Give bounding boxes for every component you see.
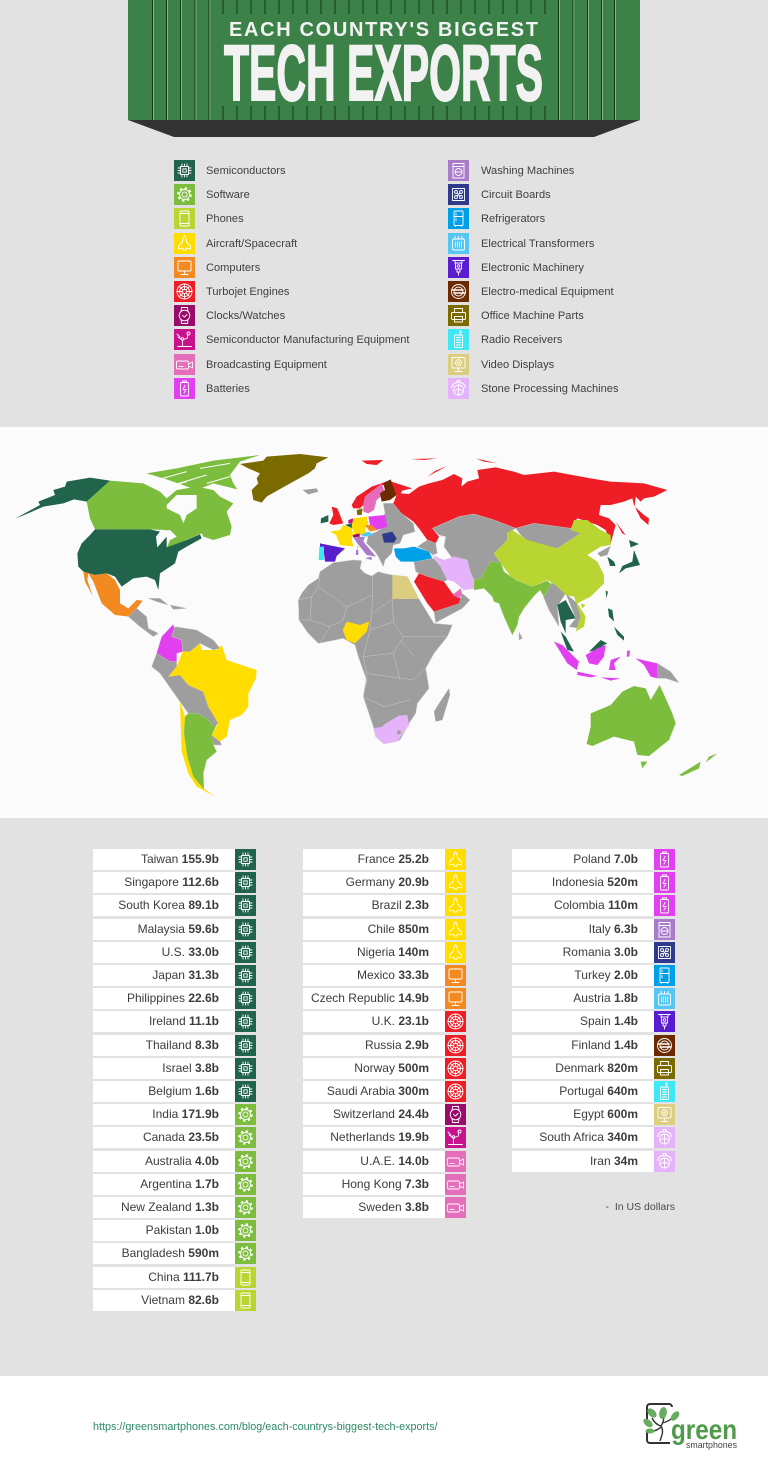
row: Egypt: Egypt 600m [573, 1107, 638, 1121]
legend item: Video Displays: Video Displays [481, 359, 554, 371]
row: Ireland: Ireland 11.1b [149, 1014, 219, 1028]
row: Australia [93, 1151, 256, 1172]
row: Argentina: Argentina 1.7b [140, 1177, 219, 1191]
row: Chile [303, 919, 466, 940]
row: Nigeria: Nigeria 140m [357, 945, 429, 959]
row: Austria: Austria 1.8b [573, 991, 638, 1005]
legend item: Electrical Transformers [448, 233, 594, 254]
row: U.A.E.: U.A.E. 14.0b [360, 1154, 429, 1168]
legend item: Video Displays [448, 354, 554, 375]
row: Thailand: Thailand 8.3b [146, 1038, 219, 1052]
map: Chile [180, 702, 215, 797]
legend item: Phones: Phones [206, 213, 244, 225]
row: Philippines: Philippines 22.6b [127, 991, 219, 1005]
row: Switzerland [303, 1104, 466, 1125]
row: South Korea: South Korea 89.1b [118, 898, 219, 912]
map: Egypt [392, 575, 419, 599]
legend item: Stone Processing Machines: Stone Processing Machines [481, 383, 619, 395]
row: Brazil: Brazil 2.3b [372, 898, 429, 912]
map: Britain and Ireland [321, 507, 343, 525]
table column 3 [512, 849, 675, 1172]
map: Mexico [83, 572, 143, 617]
row: India [93, 1104, 256, 1125]
row: Argentina [93, 1174, 256, 1195]
row: Vietnam: Vietnam 82.6b [141, 1293, 219, 1307]
legend item: Office Machine Parts: Office Machine Parts [481, 310, 584, 322]
map: Turkey [394, 547, 432, 562]
map: Eastern Europe grey [367, 503, 415, 567]
row: Turkey: Turkey 2.0b [574, 968, 638, 982]
legend item: Electronic Machinery: Electronic Machinery [481, 262, 584, 274]
row: Russia [303, 1035, 466, 1056]
row: Finland: Finland 1.4b [571, 1038, 638, 1052]
row: Germany: Germany 20.9b [346, 875, 429, 889]
note: currency: - In US dollars [606, 1201, 675, 1213]
row: New Zealand [93, 1197, 256, 1218]
row: India: India 171.9b [152, 1107, 219, 1121]
legend item: Electro-medical Equipment: Electro-medical Equipment [481, 286, 614, 298]
map: Iran [432, 555, 477, 590]
row: Colombia [512, 895, 675, 916]
map: Saudi Arabia [414, 573, 461, 612]
legend item: Semiconductor Manufacturing Equipment: Semiconductor Manufacturing Equipment [206, 334, 410, 346]
map: India, Pakistan, Bangladesh [474, 562, 551, 635]
map: Alaska [15, 478, 110, 519]
row: Malaysia: Malaysia 59.6b [138, 922, 219, 936]
row: Sweden [303, 1197, 466, 1218]
row: Nigeria [303, 942, 466, 963]
legend item: Circuit Boards: Circuit Boards [481, 189, 551, 201]
row: Indonesia: Indonesia 520m [552, 875, 638, 889]
legend item: Circuit Boards [448, 184, 551, 205]
map: Indonesia [554, 642, 657, 681]
legend item: Batteries: Batteries [206, 383, 250, 395]
row: Czech Republic: Czech Republic 14.9b [311, 991, 429, 1005]
row: Turkey [512, 965, 675, 986]
legend item: Washing Machines [448, 160, 574, 181]
panel: data table background [0, 818, 768, 1376]
row: U.S.: U.S. 33.0b [162, 945, 219, 959]
map: Australia and New Zealand [587, 685, 717, 776]
map: Iceland [303, 488, 318, 494]
row: Russia: Russia 2.9b [365, 1038, 429, 1052]
row: Japan: Japan 31.3b [152, 968, 219, 982]
legend item: Aircraft/Spacecraft: Aircraft/Spacecraft [206, 238, 297, 250]
legend item: Electronic Machinery [448, 257, 584, 278]
row: U.S. [93, 942, 256, 963]
legend item: Computers [174, 257, 260, 278]
map: Central Asia and Middle East grey [414, 514, 679, 683]
row: Singapore [93, 872, 256, 893]
row: Singapore: Singapore 112.6b [124, 875, 219, 889]
legend: left column [174, 160, 410, 399]
map: Colombia [157, 624, 183, 662]
row: Israel [93, 1058, 256, 1079]
row: China: China 111.7b [148, 1270, 219, 1284]
row: Norway [303, 1058, 466, 1079]
map: Asia and Oceania [373, 458, 717, 776]
legend item: Stone Processing Machines [448, 378, 619, 399]
legend item: Software [174, 184, 250, 205]
row: Poland [512, 849, 675, 870]
row: South Korea [93, 895, 256, 916]
map: Scandinavia [352, 460, 397, 513]
map: Romania [382, 532, 397, 543]
heading: line one: EACH COUNTRY'S BIGGEST [229, 19, 538, 41]
row: Canada [93, 1127, 256, 1148]
row: U.K.: U.K. 23.1b [372, 1014, 429, 1028]
panel: world map [0, 427, 768, 818]
legend: right column [448, 160, 619, 399]
legend item: Clocks/Watches [174, 305, 285, 326]
legend item: Refrigerators [448, 208, 545, 229]
row: Taiwan [93, 849, 256, 870]
row: Switzerland: Switzerland 24.4b [333, 1107, 429, 1121]
map: Russia [391, 458, 667, 543]
map: South America grey countries [152, 627, 222, 745]
row: Germany [303, 872, 466, 893]
row: Mexico: Mexico 33.3b [357, 968, 429, 982]
row: U.K. [303, 1011, 466, 1032]
row: Poland: Poland 7.0b [573, 852, 638, 866]
row: New Zealand: New Zealand 1.3b [121, 1200, 219, 1214]
row: Vietnam [93, 1290, 256, 1311]
legend item: Semiconductors [174, 160, 286, 181]
map: Central America and Caribbean [128, 598, 187, 637]
row: Finland [512, 1035, 675, 1056]
row: Hong Kong: Hong Kong 7.3b [342, 1177, 429, 1191]
legend item: Electro-medical Equipment [448, 281, 614, 302]
map: Nigeria [343, 622, 369, 643]
legend item: Batteries [174, 378, 250, 399]
row: Romania [512, 942, 675, 963]
row: Colombia: Colombia 110m [554, 898, 638, 912]
map: Brazil [168, 643, 257, 742]
row: Ireland [93, 1011, 256, 1032]
row: Bangladesh: Bangladesh 590m [122, 1246, 219, 1260]
row: Pakistan [93, 1220, 256, 1241]
row: Sweden: Sweden 3.8b [358, 1200, 429, 1214]
row: Italy: Italy 6.3b [589, 922, 638, 936]
legend item: Phones [174, 208, 244, 229]
row: Iran: Iran 34m [590, 1154, 638, 1168]
map: East and Southeast Asia semiconductors [557, 540, 640, 652]
row: Spain: Spain 1.4b [580, 1014, 638, 1028]
legend item: Office Machine Parts [448, 305, 584, 326]
map: Canada [87, 455, 260, 548]
legend item: Turbojet Engines [174, 281, 289, 302]
source URL: https://greensmartphones.com/blog/each-countrys-biggest-tech-exports/ [93, 1421, 437, 1433]
row: U.A.E. [303, 1151, 466, 1172]
row: Philippines [93, 988, 256, 1009]
table column 2 [303, 849, 466, 1218]
row: Belgium: Belgium 1.6b [148, 1084, 219, 1098]
row: Belgium [93, 1081, 256, 1102]
map: Africa [298, 560, 452, 744]
row: Italy [512, 919, 675, 940]
row: Israel: Israel 3.8b [162, 1061, 219, 1075]
row: Portugal: Portugal 640m [559, 1084, 638, 1098]
map: Greenland [240, 454, 328, 503]
row: Canada: Canada 23.5b [143, 1130, 219, 1144]
row: Denmark: Denmark 820m [555, 1061, 638, 1075]
row: Thailand [93, 1035, 256, 1056]
row: South Africa [512, 1127, 675, 1148]
row: Spain [512, 1011, 675, 1032]
map: Argentina [184, 713, 217, 789]
map: Americas and western regions [15, 454, 452, 797]
row: Brazil [303, 895, 466, 916]
row: Hong Kong [303, 1174, 466, 1195]
legend item: Aircraft/Spacecraft [174, 233, 298, 254]
row: Netherlands [303, 1127, 466, 1148]
legend item: Radio Receivers [448, 329, 562, 350]
row: France: France 25.2b [358, 852, 429, 866]
row: Netherlands: Netherlands 19.9b [330, 1130, 429, 1144]
row: Czech Republic [303, 988, 466, 1009]
row: China [93, 1267, 256, 1288]
legend item: Semiconductor Manufacturing Equipment [174, 329, 410, 350]
legend item: Radio Receivers: Radio Receivers [481, 334, 562, 346]
row: Pakistan: Pakistan 1.0b [146, 1223, 219, 1237]
row: Austria [512, 988, 675, 1009]
legend item: Washing Machines: Washing Machines [481, 165, 574, 177]
legend item: Semiconductors: Semiconductors [206, 165, 286, 177]
row: Norway: Norway 500m [354, 1061, 429, 1075]
row: Japan [93, 965, 256, 986]
legend item: Electrical Transformers: Electrical Transformers [481, 238, 594, 250]
legend item: Broadcasting Equipment: Broadcasting Equipment [206, 359, 327, 371]
legend item: Clocks/Watches: Clocks/Watches [206, 310, 285, 322]
legend item: Software: Software [206, 189, 250, 201]
map: Western and Central Europe [319, 508, 387, 562]
map: Vietnam [574, 597, 586, 632]
legend item: Refrigerators: Refrigerators [481, 213, 545, 225]
row: Indonesia [512, 872, 675, 893]
row: Taiwan: Taiwan 155.9b [141, 852, 219, 866]
map: Madagascar [434, 688, 450, 722]
title: shipping container banner [128, 0, 640, 137]
row: Malaysia [93, 919, 256, 940]
row: France [303, 849, 466, 870]
icon: phone outline with tree [642, 1404, 681, 1443]
legend item: Broadcasting Equipment [174, 354, 327, 375]
panel: header background [0, 0, 768, 427]
row: Mexico [303, 965, 466, 986]
map: South Africa [373, 715, 409, 744]
logo: green smartphones [640, 1398, 740, 1452]
row: Chile: Chile 850m [368, 922, 429, 936]
map: United States [77, 529, 202, 590]
map: U.A.E. [452, 588, 462, 598]
logo wordmark: smartphones: smartphones [686, 1440, 737, 1451]
row: Portugal [512, 1081, 675, 1102]
row: Saudi Arabia: Saudi Arabia 300m [327, 1084, 429, 1098]
legend item: Turbojet Engines: Turbojet Engines [206, 286, 289, 298]
row: Egypt [512, 1104, 675, 1125]
table column 1 [93, 849, 256, 1311]
row: Romania: Romania 3.0b [563, 945, 638, 959]
row: Denmark [512, 1058, 675, 1079]
row: South Africa: South Africa 340m [539, 1130, 638, 1144]
panel: footer [0, 1376, 768, 1472]
row: Iran [512, 1151, 675, 1172]
map: China [494, 520, 611, 608]
legend item: Computers: Computers [206, 262, 260, 274]
row: Australia: Australia 4.0b [145, 1154, 219, 1168]
row: Saudi Arabia [303, 1081, 466, 1102]
row: Bangladesh [93, 1243, 256, 1264]
